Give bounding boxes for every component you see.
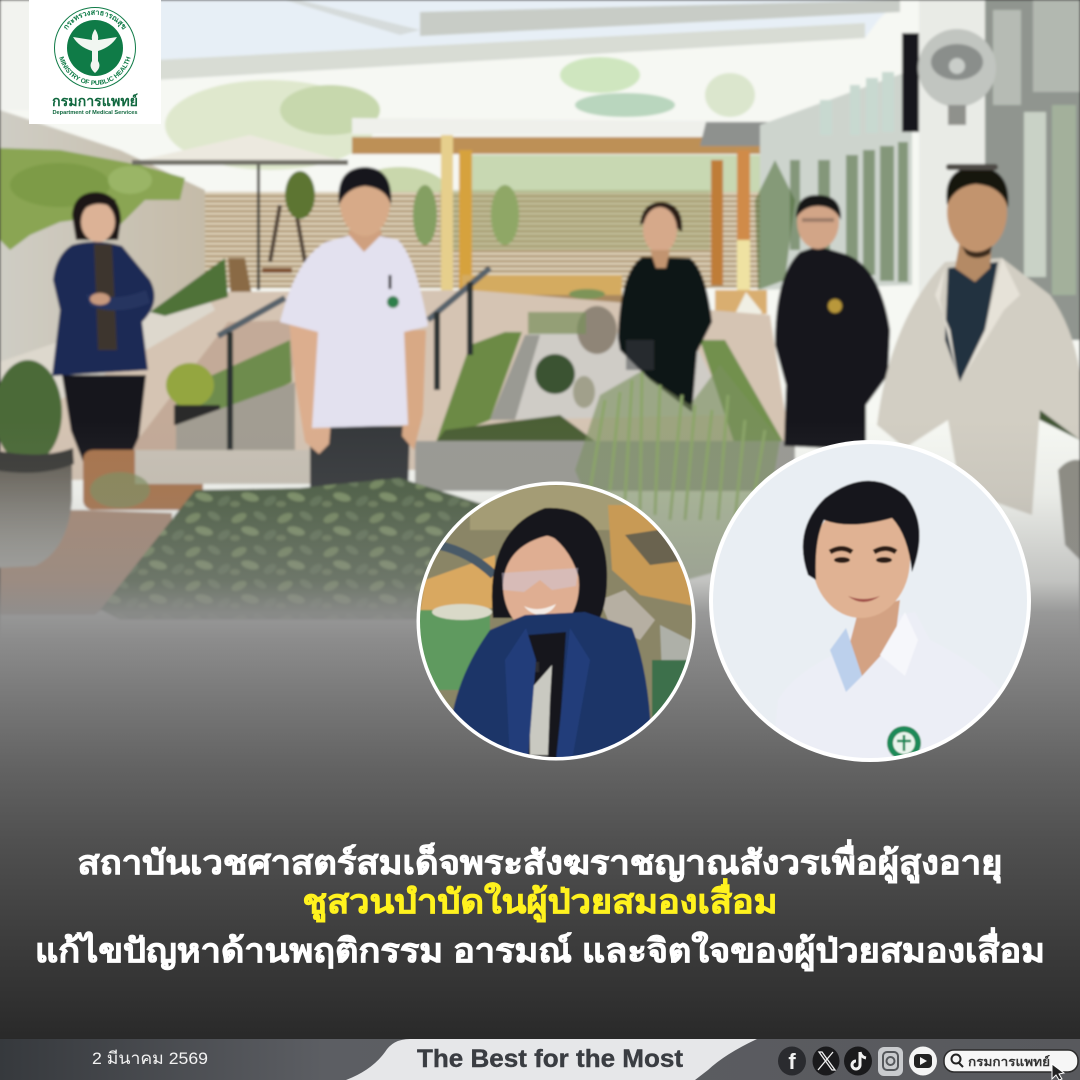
icon: X <box>812 1046 840 1076</box>
fence <box>205 192 760 288</box>
portrait: woman in navy blazer <box>416 482 696 765</box>
left wall with ivy <box>0 110 205 362</box>
seal: ministry of public health: กระทรวงสาธารณสุข <box>64 10 126 30</box>
bottom strip <box>0 1039 1080 1080</box>
ceiling <box>0 0 900 110</box>
icon: facebook: f <box>788 1049 796 1074</box>
icon: cursor <box>1052 1064 1064 1080</box>
person 4 man in black suit <box>775 195 890 450</box>
search box <box>944 1050 1078 1080</box>
search box: กรมการแพทย์ <box>968 1055 1050 1069</box>
right building <box>755 0 1080 340</box>
trees beyond garden <box>165 57 760 223</box>
person 3 woman in black <box>618 202 712 412</box>
person 2 man in white shirt <box>280 167 428 498</box>
portrait: man in white shirt <box>708 440 1032 770</box>
gradient fade overlay <box>0 420 1080 1040</box>
headline <box>35 839 1045 972</box>
icon: facebook <box>778 1046 806 1076</box>
foreground planter and plants <box>0 360 1080 620</box>
date: 2 มีนาคม 2569 <box>92 1049 208 1068</box>
terrace floor and garden beds <box>0 258 1080 491</box>
icon: instagram <box>878 1047 903 1076</box>
logo wordmark Thai: กรมการแพทย์ <box>52 93 138 109</box>
person 5 man in light blazer <box>877 164 1080 515</box>
headline line 1: สถาบันเวชศาสตร์สมเด็จพระสังฆราชญาณสังวรเพื่อผู้สูงอายุ <box>78 839 1002 884</box>
handrails <box>218 268 490 450</box>
icon: tiktok <box>844 1046 872 1076</box>
pergola <box>352 118 842 305</box>
logo wordmark English: Department of Medical Services <box>52 110 138 116</box>
bench and background planters <box>462 275 767 332</box>
hanging planters and tree trunk <box>228 160 789 320</box>
background garden photo <box>0 0 1080 640</box>
social icons <box>778 1046 1078 1080</box>
patio umbrella <box>132 135 348 290</box>
headline line 2 yellow: ชูสวนบำบัดในผู้ป่วยสมองเสื่อม <box>302 878 778 923</box>
seal: ministry of public health <box>54 7 136 89</box>
person 1 woman in navy <box>52 192 154 477</box>
wispy grass in foreground <box>575 365 780 590</box>
seal: ministry of public health: MINISTRY OF PUBLIC HEALTH <box>59 56 131 85</box>
icon: youtube <box>909 1046 937 1076</box>
slogan banner <box>346 1039 757 1080</box>
wall fan <box>918 29 996 125</box>
slogan banner: The Best for the Most <box>417 1045 684 1073</box>
logo panel <box>29 0 161 124</box>
headline line 3: แก้ไขปัญหาด้านพฤติกรรม อารมณ์ และจิตใจของผู้ป่วยสมองเสื่อม <box>35 927 1045 972</box>
